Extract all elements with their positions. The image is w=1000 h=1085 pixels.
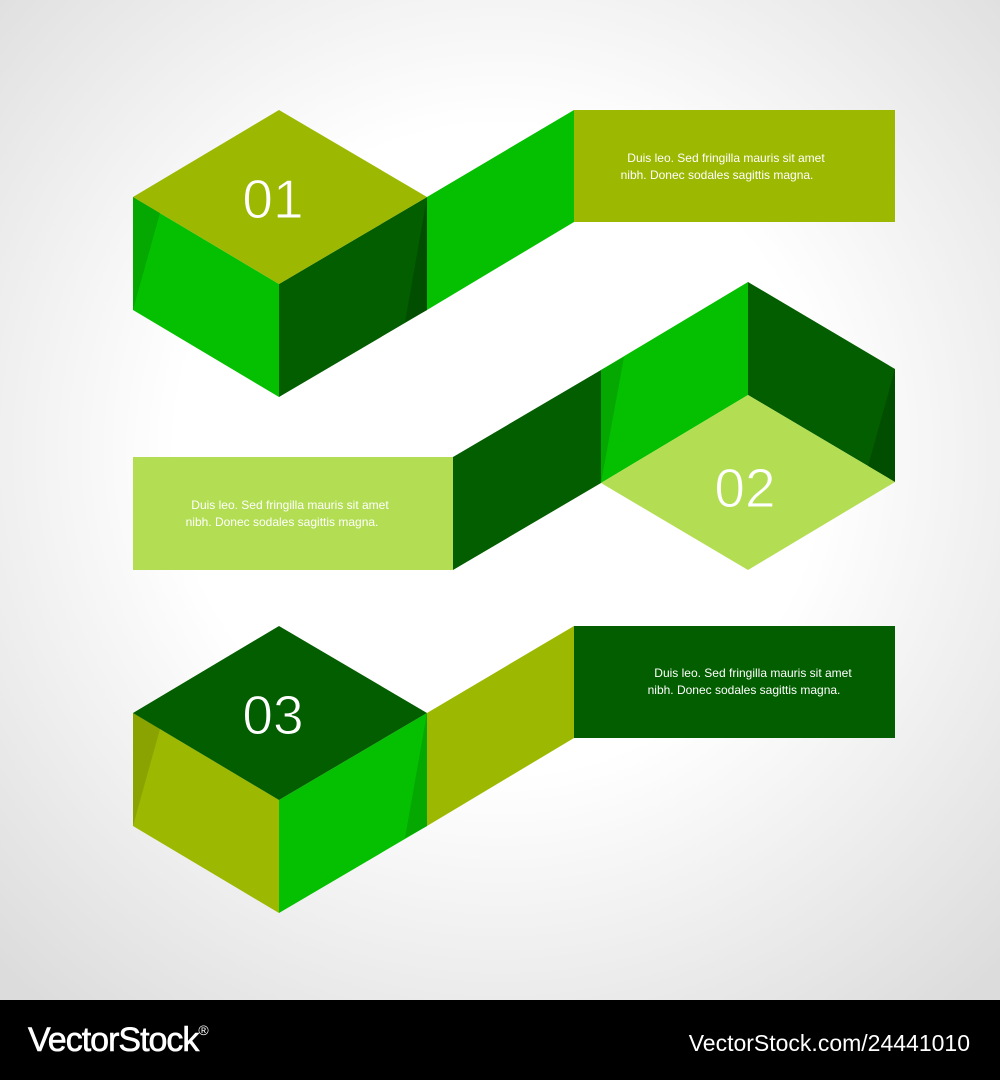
step 03	[133, 626, 895, 913]
cube 01 left face	[133, 197, 279, 397]
text box 02	[133, 457, 453, 570]
cube 02 bottom face	[601, 395, 895, 570]
ribbon 02	[453, 370, 601, 570]
cube 03 top face	[133, 626, 427, 800]
number 03: 03	[242, 684, 304, 746]
cube 03 left face	[133, 713, 279, 913]
text box 03	[574, 626, 895, 738]
footer logo: VectorStock	[28, 1021, 198, 1059]
text 03: Duis leo. Sed fringilla mauris sit amet	[654, 666, 852, 680]
footer logo: ®	[198, 1022, 209, 1038]
cube 02 left face	[601, 282, 748, 483]
number 02: 02	[714, 457, 776, 519]
text box 01	[574, 110, 895, 222]
step 02	[133, 282, 895, 570]
number 01: 01	[242, 168, 304, 230]
text 02: Duis leo. Sed fringilla mauris sit amet	[191, 498, 389, 512]
text 02: nibh. Donec sodales sagittis magna.	[186, 515, 378, 529]
cube 03 right face	[279, 713, 427, 913]
text 03: nibh. Donec sodales sagittis magna.	[648, 683, 840, 697]
ribbon 01	[427, 110, 574, 310]
ribbon 03	[427, 626, 574, 826]
cube 01 top face	[133, 110, 427, 284]
text 01: nibh. Donec sodales sagittis magna.	[621, 168, 813, 182]
cube 02 right face	[748, 282, 895, 482]
text 01: Duis leo. Sed fringilla mauris sit amet	[627, 151, 825, 165]
footer	[0, 1000, 1000, 1080]
footer id: VectorStock.com/24441010	[689, 1030, 970, 1056]
step 01	[133, 110, 895, 397]
cube 01 right face	[279, 197, 427, 397]
